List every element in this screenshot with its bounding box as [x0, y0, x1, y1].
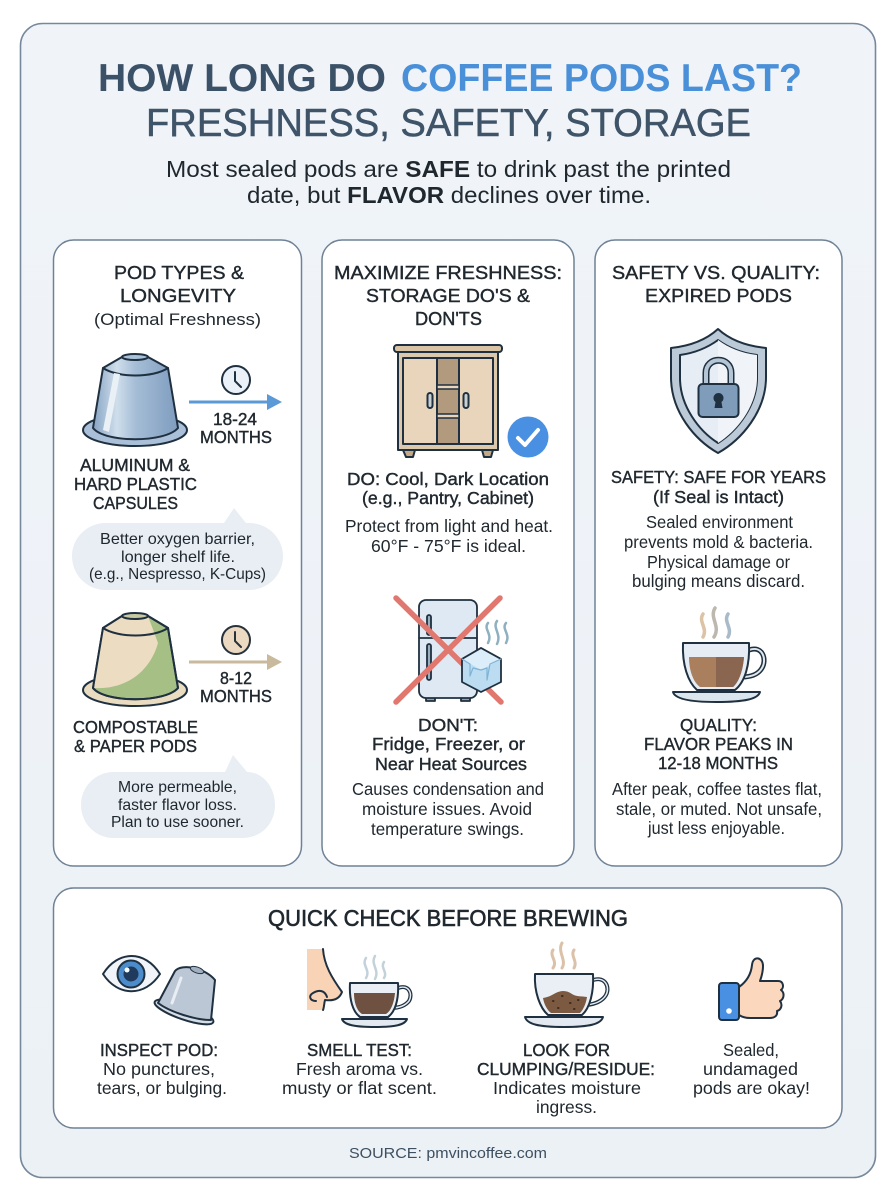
heading: quick check: QUICK CHECK BEFORE BREWING: [268, 905, 628, 931]
text: do cool dark location: DO: Cool, Dark Location: [347, 469, 549, 489]
callout: better oxygen barrier: (e.g., Nespresso, K-Cups): [89, 566, 266, 583]
text: inspect pod: tears, or bulging.: [97, 1078, 227, 1098]
heading: safety vs quality: SAFETY VS. QUALITY:: [612, 262, 820, 283]
text: safe for years: [611, 467, 826, 591]
label: compostable pods: & PAPER PODS: [74, 736, 197, 756]
text: safe for years: Sealed environment: [646, 512, 793, 532]
text: flavor peaks: 12-18 MONTHS: [658, 753, 778, 773]
title: FRESHNESS, SAFETY, STORAGE: [146, 102, 751, 145]
subtitle: Most sealed pods are SAFE to drink past the printed: [166, 156, 731, 182]
text: smell test: musty or flat scent.: [282, 1078, 437, 1098]
text: flavor peaks: FLAVOR PEAKS IN: [644, 734, 793, 754]
text: flavor peaks: stale, or muted. Not unsafe,: [616, 799, 822, 819]
text: do cool dark location: 60°F - 75°F is ideal.: [371, 536, 526, 556]
text: safe for years: bulging means discard.: [632, 571, 805, 591]
callout: more permeable: [81, 755, 275, 838]
text: inspect pod: INSPECT POD:: [100, 1040, 218, 1060]
title: HOW LONG DO: [98, 57, 386, 100]
text: smell test: [282, 1040, 437, 1098]
callout: better oxygen barrier: Better oxygen barrier,: [100, 531, 255, 548]
text: sealed pods okay: Sealed,: [723, 1040, 779, 1060]
label: 18-24 months: [200, 409, 272, 447]
icon: cabinet: [394, 345, 502, 457]
panel: quick check before brewing: [54, 888, 842, 1128]
text: do cool dark location: (e.g., Pantry, Cabinet): [362, 488, 534, 508]
icon: blue check: [508, 416, 548, 458]
text: dont fridge freezer: Near Heat Sources: [375, 754, 527, 774]
callout: better oxygen barrier: [72, 508, 283, 590]
text: safe for years: (If Seal is Intact): [653, 487, 784, 507]
text: look for clumping: [477, 1040, 655, 1117]
text: flavor peaks: [612, 715, 822, 838]
text: inspect pod: No punctures,: [103, 1059, 215, 1079]
icon: coffee grounds cup: [525, 943, 607, 1027]
text: flavor peaks: just less enjoyable.: [647, 818, 785, 838]
subtitle: [166, 156, 731, 208]
text: safe for years: Physical damage or: [647, 552, 790, 572]
callout: more permeable: Plan to use sooner.: [111, 814, 244, 831]
icon: coffee cup smell: [342, 956, 411, 1027]
heading: maximize freshness: [334, 262, 562, 329]
text: look for clumping: CLUMPING/RESIDUE:: [477, 1059, 655, 1079]
label: aluminum capsules: HARD PLASTIC: [74, 474, 197, 494]
panel: safety vs quality: [595, 240, 842, 866]
text: dont fridge freezer: moisture issues. Avoid: [362, 799, 532, 819]
text: safe for years: prevents mold & bacteria.: [624, 532, 813, 552]
heading: safety vs quality: [612, 262, 820, 306]
icon: compostable pod: [83, 613, 187, 706]
source line: SOURCE: pmvincoffee.com: [349, 1145, 547, 1162]
text: sealed pods okay: undamaged: [703, 1059, 798, 1079]
text: dont fridge freezer: Causes condensation and: [352, 779, 544, 799]
text: flavor peaks: QUALITY:: [680, 715, 757, 735]
label: 18-24 months: MONTHS: [200, 427, 272, 447]
text: dont fridge freezer: DON'T:: [418, 715, 478, 735]
heading: maximize freshness: DON'TS: [415, 308, 482, 329]
icon: thumbs up: [719, 958, 784, 1020]
heading: pod types: [94, 262, 261, 329]
callout: better oxygen barrier: longer shelf life.: [121, 549, 235, 566]
text: smell test: SMELL TEST:: [307, 1040, 412, 1060]
heading: pod types: POD TYPES &: [114, 262, 245, 283]
heading: safety vs quality: EXPIRED PODS: [645, 285, 792, 306]
text: inspect pod: [97, 1040, 227, 1098]
text: sealed pods okay: [693, 1040, 810, 1098]
icon: clock tan: [222, 626, 250, 654]
text: look for clumping: LOOK FOR: [523, 1040, 610, 1060]
icon: clock blue: [222, 366, 250, 394]
text: dont fridge freezer: [352, 715, 544, 839]
label: compostable pods: COMPOSTABLE: [73, 717, 198, 737]
text: flavor peaks: After peak, coffee tastes flat,: [612, 779, 822, 799]
text: dont fridge freezer: temperature swings.: [371, 819, 524, 839]
icon: nose: [307, 949, 342, 1010]
subtitle: date, but FLAVOR declines over time.: [247, 182, 651, 208]
text: look for clumping: ingress.: [536, 1097, 597, 1117]
callout: more permeable: faster flavor loss.: [118, 797, 237, 814]
text: safe for years: SAFETY: SAFE FOR YEARS: [611, 467, 826, 487]
icon: shield with lock: [671, 329, 766, 453]
label: 8-12 months: MONTHS: [200, 686, 272, 706]
title: [98, 57, 802, 145]
text: smell test: Fresh aroma vs.: [296, 1059, 423, 1079]
icon: crossed fridge and ice: [396, 598, 507, 702]
icon: aluminum capsule: [83, 354, 187, 446]
text: sealed pods okay: pods are okay!: [693, 1078, 810, 1098]
text: do cool dark location: [345, 469, 553, 556]
label: 8-12 months: 8-12: [220, 668, 252, 688]
label: 18-24 months: 18-24: [213, 409, 257, 429]
icon: eye: [103, 956, 160, 991]
label: aluminum capsules: CAPSULES: [93, 493, 178, 513]
icon: tilted pod: [152, 965, 216, 1029]
text: look for clumping: Indicates moisture: [493, 1078, 641, 1098]
panel: pod types and longevity: [54, 240, 302, 866]
arrow: 18-24 months: [189, 394, 282, 410]
heading: pod types: LONGEVITY: [120, 285, 236, 306]
callout: more permeable: More permeable,: [118, 779, 237, 796]
text: do cool dark location: Protect from light and heat.: [345, 516, 553, 536]
label: aluminum capsules: ALUMINUM &: [80, 455, 190, 475]
arrow: 8-12 months: [189, 654, 282, 670]
label: compostable pods: [73, 717, 198, 756]
label: aluminum capsules: [74, 455, 197, 513]
icon: coffee cup with steam: [673, 608, 764, 702]
label: 8-12 months: [200, 668, 272, 706]
panel: storage dos and donts: [322, 240, 574, 866]
heading: maximize freshness: MAXIMIZE FRESHNESS:: [334, 262, 562, 283]
title: COFFEE PODS LAST?: [401, 57, 802, 100]
text: dont fridge freezer: Fridge, Freezer, or: [372, 734, 525, 754]
heading: pod types: (Optimal Freshness): [94, 310, 261, 329]
heading: maximize freshness: STORAGE DO'S &: [366, 285, 531, 306]
